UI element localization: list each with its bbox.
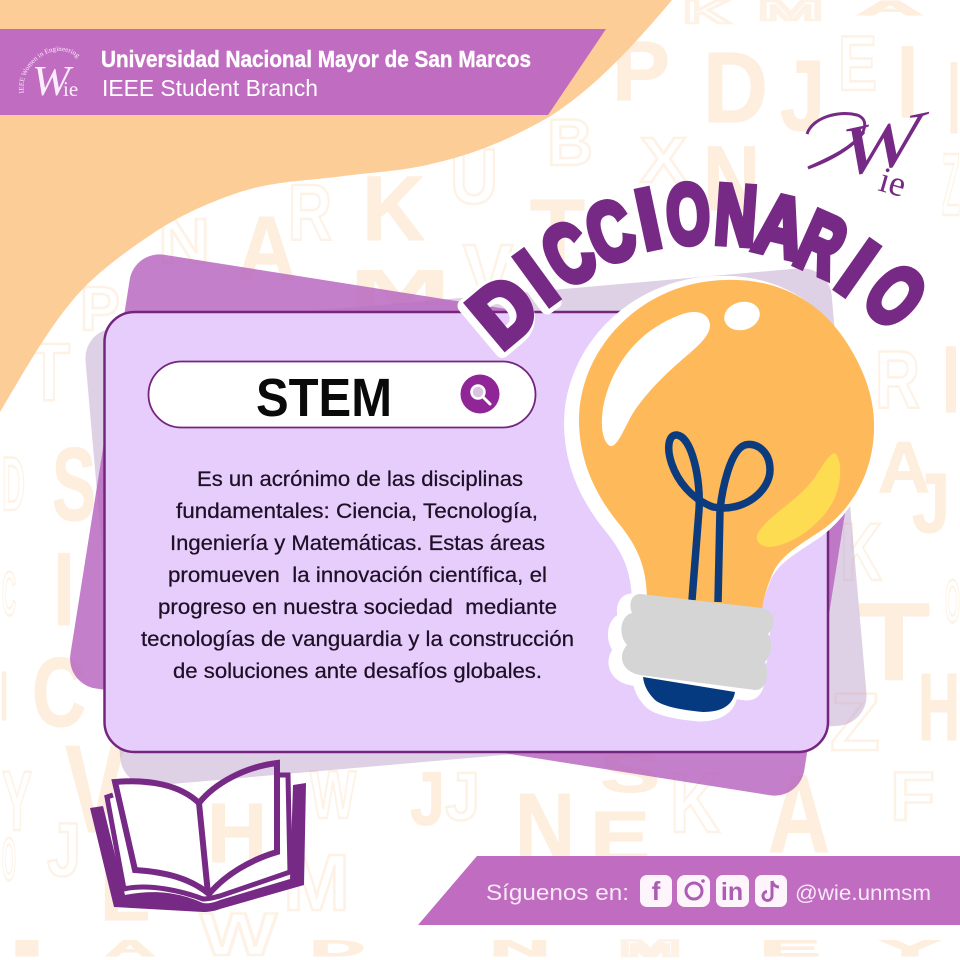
background: pale alphabet pattern: R (288, 168, 332, 257)
search term: STEM (256, 368, 392, 428)
background: pale alphabet pattern: A (768, 753, 830, 876)
definition text: tecnologías de vanguardia y la construcción (141, 628, 574, 651)
background: pale alphabet pattern: B (547, 105, 593, 179)
definition text: de soluciones ante desafíos globales. (173, 660, 542, 683)
definition text: progreso en nuestra sociedad mediante (158, 596, 557, 619)
background: pale alphabet pattern: Y (2, 754, 32, 848)
WIE logo: W (32, 59, 74, 105)
background: pale alphabet pattern: T (530, 182, 585, 282)
definition text: fundamentales: Ciencia, Tecnología, (176, 500, 538, 523)
background: pale alphabet pattern: T (28, 327, 70, 418)
background: pale alphabet pattern: V (65, 721, 125, 859)
title: DICCIONARIO: I (822, 224, 893, 312)
title: DICCIONARIO: I (498, 237, 569, 325)
background: pale alphabet pattern: A (878, 428, 930, 508)
background: pale alphabet pattern: E (590, 798, 650, 878)
background: pale alphabet pattern: F (890, 757, 935, 835)
background: pale alphabet pattern: C (2, 560, 16, 629)
title: DICCIONARIO: D (449, 260, 552, 368)
icon: linkedin (716, 875, 749, 907)
university name: Universidad Nacional Mayor de San Marcos (101, 46, 531, 72)
definition text: promueven la innovación científica, el (168, 564, 547, 587)
WIE script logo: W (837, 96, 930, 194)
background: pale alphabet pattern: S (600, 740, 660, 805)
background: pale alphabet pattern: K (670, 756, 720, 850)
main card (104, 312, 828, 752)
WIE logo: IEEE Women in Engineering (18, 46, 80, 94)
icon: tiktok (755, 875, 787, 907)
background: pale alphabet pattern: M (283, 838, 350, 927)
background: pale alphabet pattern: N (158, 205, 210, 277)
icon: open book (90, 763, 306, 912)
background: pale alphabet pattern: K (362, 158, 425, 260)
title: DICCIONARIO: O (663, 166, 713, 262)
background: pale alphabet pattern: C (32, 637, 86, 747)
icon: facebook: f (652, 876, 661, 906)
background: pale alphabet pattern: D (703, 32, 768, 144)
background: pale alphabet pattern: W (310, 757, 357, 833)
WIE logo: ie (63, 77, 78, 101)
social handle: @wie.unmsm (795, 882, 931, 905)
search bar (148, 362, 536, 428)
background: pale alphabet pattern: T (858, 581, 930, 704)
background: pale alphabet pattern: V (463, 228, 513, 317)
background: pale alphabet pattern: J (445, 759, 480, 835)
background: pale alphabet pattern: L (100, 857, 150, 935)
peach wave corner (0, 0, 672, 412)
title: DICCIONARIO: R (784, 193, 859, 295)
back panel: purple tilted card (66, 250, 868, 800)
WIE script logo: ie (875, 159, 911, 205)
background: pale alphabet pattern: E (838, 19, 877, 107)
background: pale alphabet pattern: I (897, 25, 918, 139)
background: pale alphabet pattern: A (237, 198, 296, 300)
background: pale alphabet pattern: J (410, 757, 445, 842)
background: pale alphabet pattern: X (640, 124, 687, 196)
background: pale alphabet pattern: D (2, 442, 25, 527)
background: pale alphabet pattern: J (780, 40, 825, 152)
icon: magnifying glass (460, 374, 500, 414)
definition text: Ingeniería y Matemáticas. Estas áreas (170, 532, 545, 555)
background: pale alphabet pattern: N (515, 774, 575, 881)
background: pale alphabet pattern: R (875, 335, 920, 426)
back panel: lavender tilted card (83, 266, 869, 788)
WIE script logo (807, 96, 930, 205)
title: DICCIONARIO: O (847, 245, 944, 346)
title: DICCIONARIO: C (574, 180, 647, 283)
title: DICCIONARIO: N (712, 167, 760, 263)
definition text: Es un acrónimo de las disciplinas (197, 468, 523, 491)
icon: facebook (640, 875, 672, 907)
background: pale alphabet pattern: S (52, 427, 96, 543)
background: pale alphabet pattern: O (2, 826, 16, 893)
background: pale alphabet pattern: I (0, 657, 8, 735)
title: DICCIONARIO (449, 166, 944, 368)
title: DICCIONARIO: C (526, 202, 611, 305)
footer banner (418, 856, 960, 925)
background: pale alphabet pattern: P (80, 275, 120, 344)
background: pale alphabet pattern: U (450, 132, 498, 220)
title: DICCIONARIO: A (747, 175, 814, 277)
branch name: IEEE Student Branch (102, 75, 318, 101)
title: DICCIONARIO: I (629, 171, 668, 267)
background: pale alphabet pattern: Z (830, 677, 880, 768)
title: DICCIONARIO: I (501, 234, 572, 322)
background: pale alphabet pattern: H (207, 786, 267, 880)
background: pale alphabet pattern: P (612, 24, 670, 118)
background: pale alphabet pattern: M (350, 260, 450, 316)
background: pale alphabet pattern: J (47, 808, 81, 893)
icon: linkedin: in (721, 878, 743, 906)
background: pale alphabet pattern: K (840, 507, 882, 598)
background: pale alphabet pattern: J (912, 456, 950, 550)
icon: light bulb (571, 280, 874, 715)
follow label: Síguenos en: (486, 880, 629, 905)
background: pale alphabet pattern: I (53, 532, 75, 648)
header banner (0, 29, 606, 115)
title: DICCIONARIO: D (452, 257, 555, 365)
definition text (141, 468, 574, 683)
icon: instagram (677, 875, 710, 907)
background: pale alphabet pattern: N (703, 128, 760, 230)
